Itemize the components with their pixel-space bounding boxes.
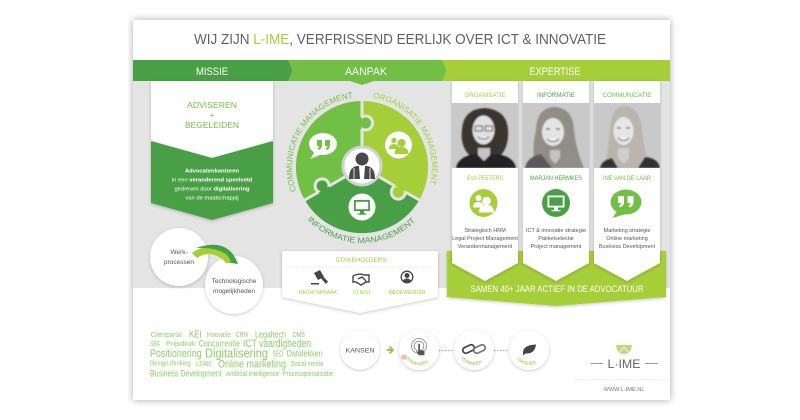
curved label: informatie management: INFORMATIE MANAGEMENT xyxy=(308,216,414,244)
icon: gavel xyxy=(311,270,328,284)
joint: communicatie to organisatie xyxy=(355,99,373,167)
word cloud: KEI xyxy=(189,330,202,340)
photo: Marjan Hermkes xyxy=(523,103,589,168)
curved label: groeien: GROEIEN xyxy=(518,358,536,365)
segment: informatie xyxy=(305,167,419,233)
arrow: kansen to vernieuwen xyxy=(386,346,393,354)
title: WIJ ZIJN L-IME, VERFRISSEND EERLIJK OVER ICT & INNOVATIE xyxy=(194,32,606,48)
icon: monitor xyxy=(348,194,376,220)
website: WWW.L-IME.NL xyxy=(604,387,644,393)
joint: organisatie to informatie xyxy=(357,161,424,210)
expertise list: Legal Project Management xyxy=(452,236,518,242)
word cloud: Positionering xyxy=(150,348,202,360)
expertise list: Online marketing xyxy=(606,236,648,242)
panel: informatie / Marjan Hermkes xyxy=(523,81,589,281)
expertise list: ICT & innovatie strategie xyxy=(526,228,586,234)
band: aanpak xyxy=(285,60,446,85)
icon: speech bubble xyxy=(309,133,337,159)
circle: groeien xyxy=(508,330,550,372)
icon: speech bubble xyxy=(610,190,642,218)
card heading: ORGANISATIE xyxy=(464,93,506,99)
card heading: COMMUNICATIE xyxy=(602,93,652,99)
expertise list xyxy=(599,228,656,250)
arrow: curved link between circles xyxy=(192,245,238,264)
puzzle diagram xyxy=(286,92,438,244)
curved label: communicatie management: COMMUNICATIE MANAGEMENT xyxy=(286,92,352,192)
band: expertise xyxy=(441,60,670,85)
expertise list: Strategisch HRM xyxy=(464,228,506,234)
process flow xyxy=(339,330,550,372)
panel: stakeholders xyxy=(282,251,438,313)
icon: monitor xyxy=(542,189,570,217)
card name: EVA PEETERS xyxy=(467,176,503,182)
circle: kansen xyxy=(340,330,380,370)
panel: missie xyxy=(151,81,273,220)
curved label: vernieuwen: VERNIEUWEN xyxy=(406,355,428,366)
icon: chain links xyxy=(462,344,486,354)
curved label: verbinden: VERBINDEN xyxy=(462,356,482,366)
page card xyxy=(133,20,670,400)
expertise list xyxy=(526,228,586,250)
header band xyxy=(133,60,670,85)
icon: leaf xyxy=(523,344,536,356)
missie green card xyxy=(151,141,273,220)
icon: people xyxy=(385,132,412,158)
word cloud: Innovatie xyxy=(207,332,231,339)
card body xyxy=(523,81,589,281)
circle: technologische mogelijkheden: Technologische xyxy=(212,278,257,285)
band: aanpak: AANPAK xyxy=(345,66,388,78)
word cloud: Social media xyxy=(291,361,323,368)
card name: INE VAN DE LAAR xyxy=(603,176,652,182)
expertise list: Project management xyxy=(531,244,582,250)
icon: lawyer centre xyxy=(343,147,381,185)
circle: werkprocessen: processen xyxy=(164,259,194,266)
missie white card: BEGELEIDEN xyxy=(185,120,239,130)
icon: handshake xyxy=(353,274,369,285)
card body xyxy=(594,81,660,281)
word cloud: LEAN xyxy=(196,361,211,368)
circle: technologische mogelijkheden xyxy=(205,256,263,314)
curved label: organisatie management: ORGANISATIE MANAGEMENT xyxy=(374,92,438,186)
logo xyxy=(591,345,658,371)
circle: vernieuwen xyxy=(398,330,440,372)
missie white card: + xyxy=(210,111,215,120)
expertise list: Business Development xyxy=(599,244,656,250)
word cloud xyxy=(150,330,333,378)
panel: organisatie / Eva Peeters xyxy=(452,81,518,281)
word cloud: SEA xyxy=(150,341,160,348)
panel: communicatie / Ine van de Laar xyxy=(594,81,660,281)
word cloud: Legaltech xyxy=(255,330,286,340)
word cloud: SEO xyxy=(273,350,283,358)
word cloud: DMS xyxy=(293,332,305,339)
label: medewerker: MEDEWERKER xyxy=(388,290,426,296)
word cloud: Datalekken xyxy=(287,348,323,358)
circle: technologische mogelijkheden: mogelijkheden xyxy=(213,288,255,295)
logo wordmark: L·IME xyxy=(608,357,640,371)
dotted connectors xyxy=(439,350,510,352)
word cloud: ICT vaardigheden xyxy=(243,338,311,350)
expertise list: Pakketselectie xyxy=(538,236,574,242)
word cloud: Prijsdruk xyxy=(166,341,196,348)
expertise list: Marketing strategie xyxy=(604,228,650,234)
circle: kansen: KANSEN xyxy=(346,348,375,354)
word cloud: CRM xyxy=(236,332,248,339)
band: missie: MISSIE xyxy=(196,66,228,78)
band: missie xyxy=(133,60,292,81)
expertise list xyxy=(452,228,518,250)
icon: medewerker xyxy=(401,271,413,283)
segment: communicatie xyxy=(296,101,362,200)
photo: Eva Peeters xyxy=(452,103,518,168)
missie white card: ADVISEREN xyxy=(187,100,237,110)
word cloud: Concurrentie xyxy=(199,338,240,348)
icon: people xyxy=(470,189,498,217)
word cloud: Clientportal xyxy=(151,332,182,339)
stakeholders heading: STAKEHOLDERS xyxy=(336,257,387,264)
card body xyxy=(452,81,518,281)
label: client: CLIENT xyxy=(353,290,372,296)
label: rechtspraak: RECHTSPRAAK xyxy=(299,290,338,296)
logo mark xyxy=(616,345,632,354)
word cloud: Artificial intelligence xyxy=(226,371,279,378)
word cloud: Design thinking xyxy=(150,360,191,368)
circle: verbinden xyxy=(452,330,496,372)
circle: werkprocessen xyxy=(150,228,208,286)
word cloud: Online marketing xyxy=(218,358,286,370)
expertise list: Verandermanagement xyxy=(458,244,513,250)
photo: Ine van de Laar xyxy=(594,103,660,168)
panel: expertise green banner: SAMEN 40+ JAAR ACTIEF IN DE ADVOCATUUR xyxy=(470,284,644,295)
missie green card: in een veranderend speelveld xyxy=(172,178,253,184)
missie green card: Advocatenkantoren xyxy=(185,168,240,174)
segment: organisatie xyxy=(362,101,428,200)
pink marker xyxy=(402,355,406,360)
band: expertise: EXPERTISE xyxy=(530,66,580,78)
missie white card xyxy=(151,81,273,158)
icon: touch xyxy=(412,338,426,356)
word cloud: Digitalisering xyxy=(205,346,268,360)
missie green card: van de maatschappij xyxy=(185,196,239,202)
card name: MARJAN HERMKES xyxy=(530,176,582,182)
word cloud: Business Development xyxy=(150,368,222,378)
word cloud: Procesoptimalisatie xyxy=(283,371,333,378)
circle: werkprocessen: Werk- xyxy=(170,249,188,256)
missie green card: gedreven door digitalisering xyxy=(174,186,250,192)
joint: informatie to communicatie xyxy=(298,158,366,207)
card heading: INFORMATIE xyxy=(537,93,575,99)
panel: expertise green banner xyxy=(447,251,666,306)
